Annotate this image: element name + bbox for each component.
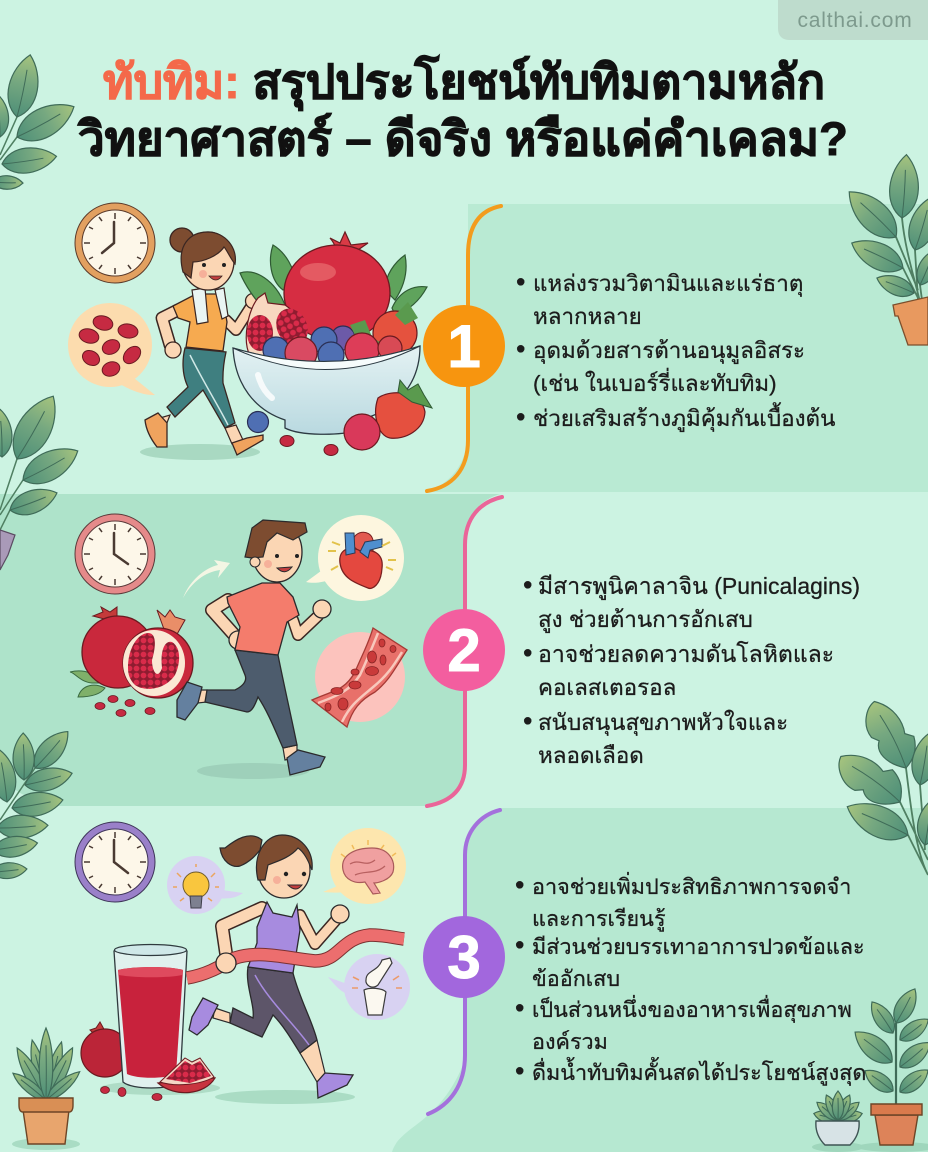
- row 1 bullets: •: [516, 334, 525, 364]
- row 3 bullets: ดื่มน้ำทับทิมคั้นสดได้ประโยชน์สูงสุด: [532, 1057, 866, 1086]
- pomegranates: [70, 607, 193, 716]
- icon: blood vessel: [312, 628, 407, 727]
- icon: orange clock: [75, 203, 155, 283]
- row 3 connector and number: [423, 810, 505, 1114]
- title: [77, 54, 848, 165]
- row 3 bullets: [515, 870, 866, 1086]
- row 2 connector and number: [423, 497, 505, 806]
- row 2 bullets: หลอดเลือด: [538, 743, 644, 768]
- row 3 bullets: ข้ออักเสบ: [532, 966, 620, 991]
- arrow: [183, 560, 230, 598]
- scene 3 illustration: [75, 822, 410, 1104]
- row 1 connector and number: 1: [447, 313, 481, 380]
- icon: brain speech bubble: [323, 828, 406, 904]
- row 3 connector and number: 3: [447, 924, 481, 991]
- icon: heart speech bubble: [306, 515, 404, 601]
- woman walking: [140, 228, 263, 460]
- row 3 bullets: •: [515, 993, 524, 1023]
- title: ทับทิม: สรุปประโยชน์ทับทิมตามหลัก: [103, 54, 825, 111]
- row 1 bullets: อุดมด้วยสารต้านอนุมูลอิสระ: [533, 338, 805, 364]
- row 1 bullets: (เช่น ในเบอร์รี่และทับทิม): [533, 367, 777, 396]
- row 2 bullets: อาจช่วยลดความดันโลหิตและ: [538, 641, 834, 667]
- panel: row 1 text background: [428, 204, 928, 492]
- icon: knee joint speech bubble: [328, 954, 410, 1020]
- row 2 connector and number: 2: [447, 617, 481, 684]
- row 3 bullets: •: [515, 1056, 524, 1086]
- runner man: [177, 520, 331, 779]
- panel: row 3 text background: [392, 808, 928, 1152]
- row 1 bullets: แหล่งรวมวิตามินและแร่ธาตุ: [533, 271, 803, 297]
- plant: top left: [0, 52, 81, 190]
- plant: bottom left pot: [9, 1028, 83, 1150]
- row 1 bullets: •: [516, 402, 525, 432]
- row 3 bullets: องค์รวม: [532, 1029, 608, 1054]
- plant: mid right: [829, 693, 928, 875]
- finish line runner: [187, 835, 404, 1104]
- plant: lower left: [0, 724, 76, 880]
- row 1 bullets: ช่วยเสริมสร้างภูมิคุ้มกันเบื้องต้น: [533, 402, 835, 432]
- icon: pink clock: [75, 514, 155, 594]
- panel: row 2 illustration background: [0, 494, 500, 806]
- row 2 bullets: สูง ช่วยต้านการอักเสบ: [538, 607, 753, 633]
- juice glass and pomegranates: [81, 944, 220, 1100]
- row 3 bullets: มีส่วนช่วยบรรเทาอาการปวดข้อและ: [532, 934, 865, 959]
- row 2 bullets: มีสารพูนิคาลาจิน (Punicalagins): [538, 573, 860, 600]
- plant: bottom right small pot: [812, 1091, 864, 1152]
- row 2 bullets: •: [523, 570, 532, 600]
- row 3 bullets: •: [515, 930, 524, 960]
- row 2 bullets: •: [523, 638, 532, 668]
- row 3 bullets: •: [515, 870, 524, 900]
- scene 2 illustration: [70, 514, 407, 779]
- plant: bottom right large pot: [848, 985, 928, 1152]
- row 2 bullets: สนับสนุนสุขภาพหัวใจและ: [538, 710, 788, 736]
- watermark: [778, 0, 928, 40]
- plant: top right with pot: [839, 154, 928, 345]
- row 2 bullets: [523, 570, 860, 768]
- row 3 bullets: และการเรียนรู้: [532, 906, 666, 932]
- watermark: calthai.com: [797, 9, 913, 32]
- row 1 bullets: •: [516, 267, 525, 297]
- row 2 bullets: คอเลสเตอรอล: [538, 675, 676, 700]
- row 1 connector and number: [423, 206, 505, 491]
- icon: seeds speech bubble: [68, 303, 155, 395]
- row 1 bullets: [516, 267, 835, 432]
- icon: light bulb speech bubble: [167, 856, 243, 914]
- row 1 bullets: หลากหลาย: [533, 304, 642, 329]
- icon: purple clock: [75, 822, 155, 902]
- row 3 bullets: เป็นส่วนหนึ่งของอาหารเพื่อสุขภาพ: [532, 995, 852, 1023]
- plant: mid left with pot: [0, 388, 84, 570]
- row 2 bullets: •: [523, 706, 532, 736]
- title: วิทยาศาสตร์ – ดีจริง หรือแค่คำเคลม?: [77, 112, 848, 165]
- bowl of fruit: [233, 232, 432, 456]
- scene 1 illustration: [68, 203, 432, 460]
- row 3 bullets: อาจช่วยเพิ่มประสิทธิภาพการจดจำ: [532, 872, 851, 899]
